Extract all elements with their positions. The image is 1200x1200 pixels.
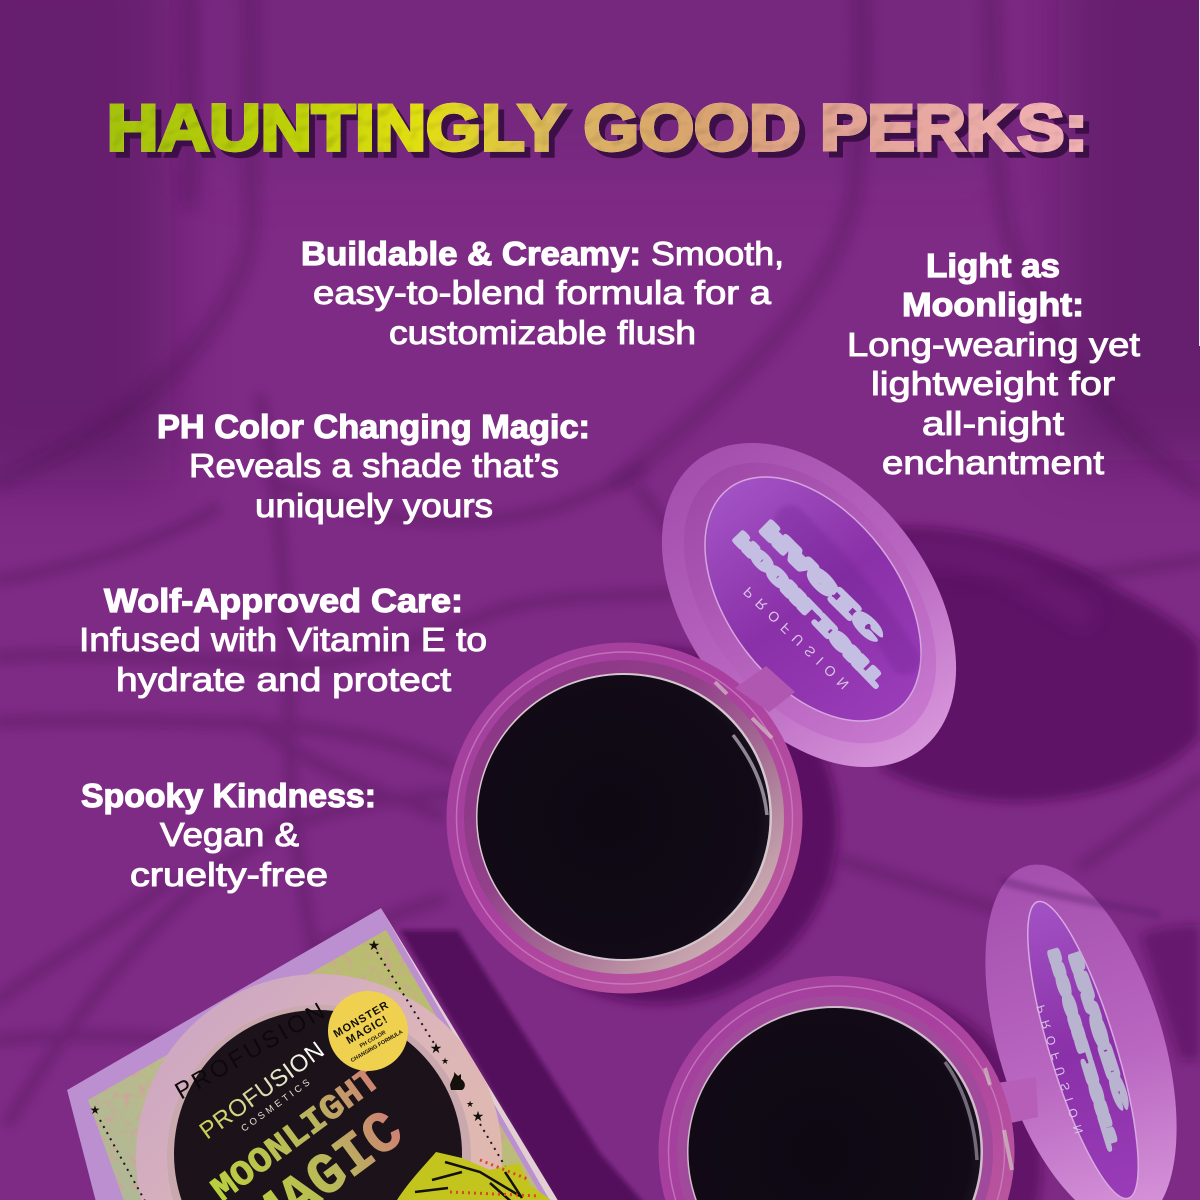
stars and moons xyxy=(90,938,484,1125)
wolf illustration xyxy=(397,1152,558,1200)
text block: wolf-approved care xyxy=(79,582,487,698)
dotted line xyxy=(100,952,540,1200)
text block: light as moonlight: Long-wearing yet xyxy=(847,326,1140,363)
open compact top: base with black pan xyxy=(446,642,802,994)
text block: ph color changing magic: Reveals a shade that’s xyxy=(189,447,559,484)
cosmetics text: COSMETICS xyxy=(239,1077,312,1134)
text block: buildable and creamy xyxy=(301,235,784,351)
text block: buildable and creamy: customizable flush xyxy=(389,314,696,351)
open compact bottom: lid: MOONLIGHT xyxy=(1047,950,1122,1148)
brand text black: PROFUSION xyxy=(170,998,329,1105)
sticker: monster magic: PH COLOR xyxy=(359,1030,387,1050)
text block: spooky kindness: cruelty-free xyxy=(130,856,328,893)
text block: wolf-approved care: hydrate and protect xyxy=(116,661,451,698)
stars and moons: ★ xyxy=(472,1109,484,1125)
open compact top: lid xyxy=(602,387,1016,823)
stars and moons: ★ xyxy=(466,1100,474,1110)
text block: ph color changing magic: uniquely yours xyxy=(255,487,493,524)
text block: wolf-approved care: Infused with Vitamin E to xyxy=(79,621,487,658)
text block: buildable and creamy: Smooth, xyxy=(651,235,784,272)
holographic insert card xyxy=(88,930,585,1200)
open compact bottom: lid: PROFUSION xyxy=(1033,1003,1086,1135)
text block: wolf-approved care: Wolf-Approved Care: xyxy=(104,582,463,619)
sticker: monster magic: MONSTER xyxy=(332,999,391,1040)
compact 2 cast shadow xyxy=(682,987,1042,1200)
open compact top: lid: PROFUSION xyxy=(740,584,852,693)
sticker: monster magic xyxy=(313,976,423,1086)
brand text light: PROFUSION xyxy=(195,1037,329,1145)
text block: ph color changing magic xyxy=(157,408,590,524)
text block: spooky kindness: Spooky Kindness: xyxy=(81,777,376,814)
text block: light as moonlight: lightweight for xyxy=(871,365,1115,402)
text block: light as moonlight: Moonlight: xyxy=(902,286,1084,323)
text block: ph color changing magic: PH Color Changing Magic: xyxy=(157,408,590,445)
stars and moons: ★ xyxy=(368,938,380,954)
title: HAUNTINGLY GOOD PERKS: xyxy=(113,97,1094,170)
text block: spooky kindness: Vegan & xyxy=(160,816,299,853)
sticker: monster magic: MAGIC! xyxy=(344,1013,391,1047)
open compact top: lid: MAGIC xyxy=(758,516,889,646)
text block: spooky kindness xyxy=(81,777,376,893)
open compact bottom: base with black pan xyxy=(658,976,1038,1200)
open compact bottom: lid xyxy=(948,842,1200,1200)
stars and moons: ★ xyxy=(90,1103,100,1117)
text block: buildable and creamy: Buildable & Creamy: xyxy=(301,235,641,272)
text block: buildable and creamy: easy-to-blend formula for a xyxy=(313,274,772,311)
text block: light as moonlight: all-night xyxy=(922,405,1064,442)
box cast shadow xyxy=(400,930,650,1200)
product box xyxy=(67,908,600,1200)
compact inside box xyxy=(136,974,502,1200)
text block: light as moonlight xyxy=(847,247,1140,481)
lower right shadow patch xyxy=(1140,925,1200,1060)
lid cast shadow blob xyxy=(880,527,1200,802)
open compact top: lid: MOONLIGHT xyxy=(731,528,888,689)
stars and moons: ★ xyxy=(441,1057,449,1067)
stars and moons: ★ xyxy=(430,1041,442,1057)
open compact bottom: lid: MAGIC xyxy=(1068,953,1134,1110)
text block: light as moonlight: Light as xyxy=(926,247,1060,284)
compact 1 cast shadow xyxy=(478,648,838,1004)
text block: light as moonlight: enchantment xyxy=(882,444,1104,481)
title: HAUNTINGLY GOOD PERKS: xyxy=(107,91,1088,164)
sticker: monster magic: CHANGING FORMULA xyxy=(350,1029,404,1064)
